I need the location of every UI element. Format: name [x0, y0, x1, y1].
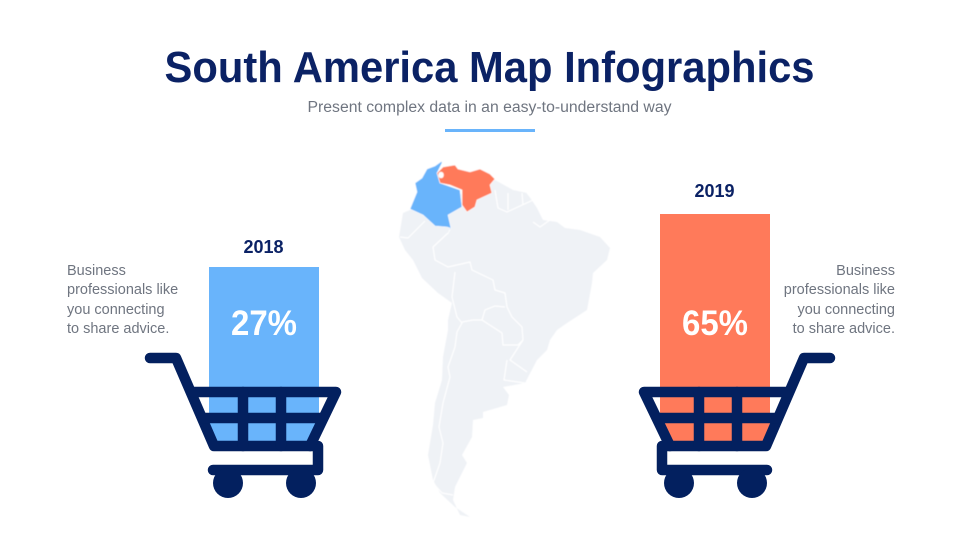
title: South America Map Infographics [164, 43, 814, 92]
map: continent [399, 180, 610, 517]
subtitle: Present complex data in an easy-to-understand way [308, 99, 672, 116]
text block: left: to share advice. [67, 321, 169, 337]
label: 65%: 65% [682, 304, 748, 343]
title underline [445, 129, 535, 132]
text block: left: you connecting [67, 302, 165, 318]
bar: 2018 value [209, 267, 319, 413]
text block: left: professionals like [67, 282, 178, 298]
icon: right shopping cart [644, 358, 830, 498]
label: 27%: 27% [231, 304, 297, 343]
map: Venezuela [437, 165, 495, 212]
bar: 2019 value [660, 214, 770, 413]
text block: right [784, 263, 895, 337]
text block: right: professionals like [784, 282, 895, 298]
map: Colombia [410, 161, 462, 234]
map: borders [400, 190, 550, 495]
icon: left shopping cart [150, 358, 336, 498]
map: South America [399, 161, 610, 517]
text block: right: Business [836, 263, 895, 279]
text block: right: you connecting [797, 302, 895, 318]
year label 2018: 2018 [243, 237, 284, 257]
text block: left: Business [67, 263, 126, 279]
text block: right: to share advice. [793, 321, 895, 337]
year label 2019: 2019 [694, 181, 735, 201]
text block: left [67, 263, 178, 337]
